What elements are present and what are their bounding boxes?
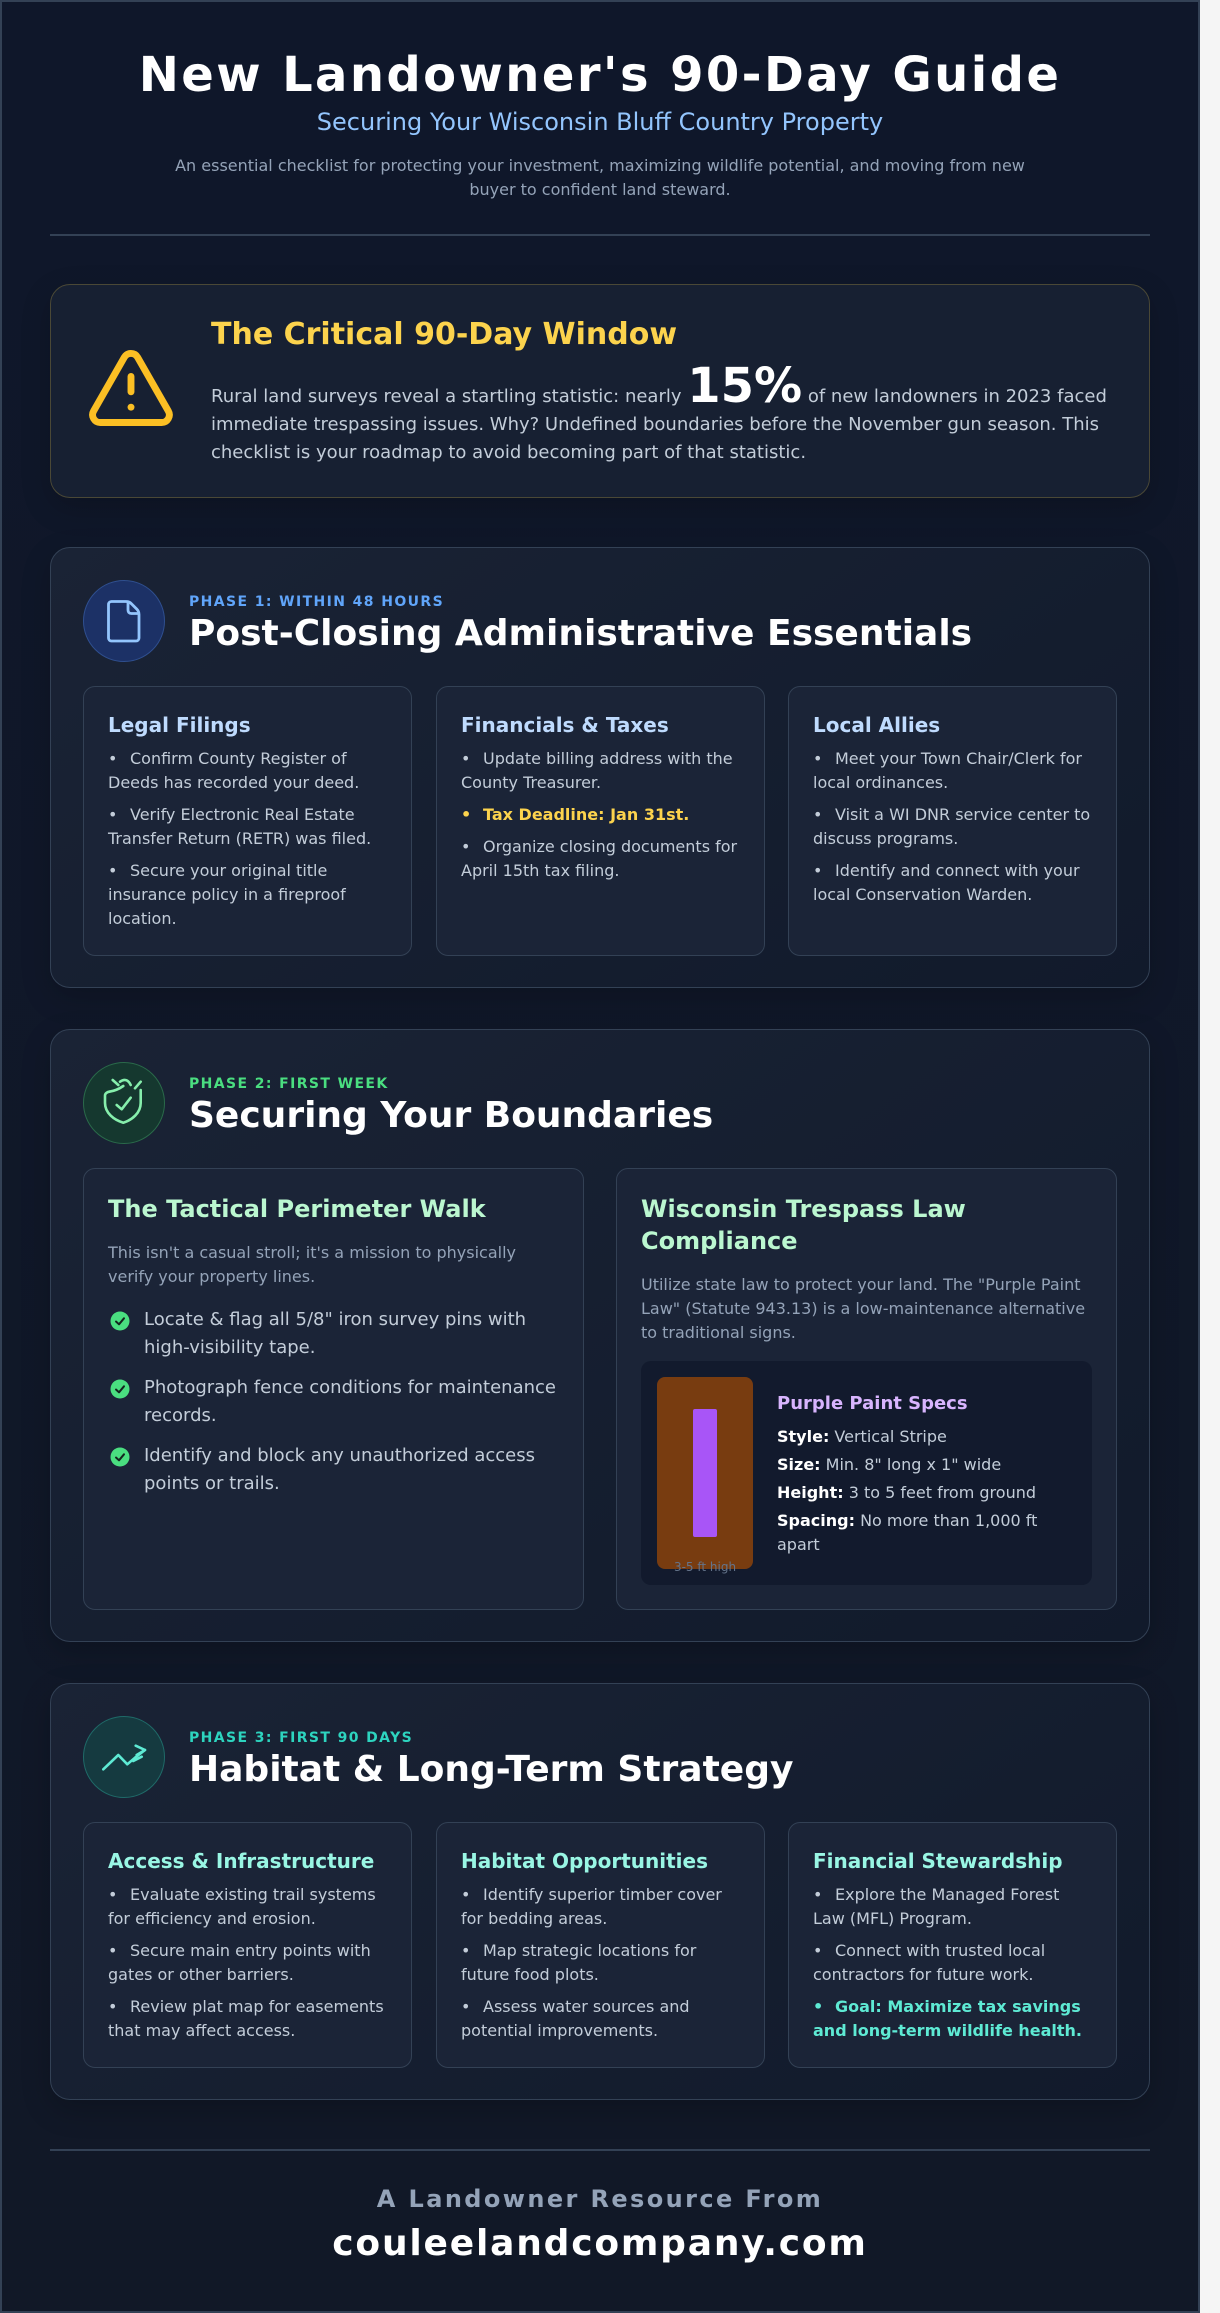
- card heading: Wisconsin Trespass Law Compliance: [641, 1195, 966, 1255]
- panel: critical 90-day window: [50, 284, 1150, 498]
- header: [139, 47, 1061, 199]
- card: financial stewardship: •: [813, 1885, 822, 1904]
- card: financial stewardship: •: [813, 1941, 822, 1960]
- card: tactical perimeter walk: [83, 1168, 584, 1610]
- card: local allies: Identify and connect with your local Conservation Warden.: [813, 861, 1080, 904]
- body text with 15% statistic: Rural land surveys reveal a startling statistic: nearly 15% of new landowners in 2023 faced: [211, 358, 1107, 414]
- card: local allies: Local Allies: [813, 713, 940, 737]
- footer label: A Landowner Resource From: [377, 2185, 823, 2213]
- card: financials and taxes: [436, 686, 765, 956]
- card: trespass law: [616, 1168, 1117, 1610]
- phase heading: Securing Your Boundaries: [189, 1095, 713, 1136]
- card intro: This isn't a casual stroll; it's a mission to physically verify your property lines.: [108, 1243, 516, 1286]
- card: habitat opportunities: [436, 1822, 765, 2068]
- card: local allies: [788, 686, 1117, 956]
- card: financials and taxes: Update billing address with the County Treasurer.: [461, 749, 733, 792]
- card: legal filings: Legal Filings: [108, 713, 251, 737]
- card intro: Utilize state law to protect your land. The "Purple Paint Law" (Statute 943.13) is a low-maintenance alternative to traditional signs.: [641, 1275, 1085, 1342]
- card: financial stewardship: [788, 1822, 1117, 2068]
- spec list: [777, 1393, 1037, 1554]
- spec list: Height: 3 to 5 feet from ground: [777, 1483, 1036, 1502]
- purple paint spec box: [641, 1361, 1092, 1585]
- card: access and infrastructure: •: [108, 1885, 117, 1904]
- icon: warning triangle: [89, 350, 173, 426]
- card: habitat opportunities: •: [461, 1941, 470, 1960]
- heading: The Critical 90-Day Window: [211, 317, 677, 352]
- checklist: Locate & flag all 5/8" iron survey pins with high-visibility tape.: [144, 1309, 526, 1358]
- phase heading: Post-Closing Administrative Essentials: [189, 613, 972, 654]
- intro text: buyer to confident land steward.: [469, 180, 731, 199]
- card: access and infrastructure: Secure main entry points with gates or other barriers.: [108, 1941, 371, 1984]
- card: habitat opportunities: Assess water sources and potential improvements.: [461, 1997, 690, 2040]
- card: financial stewardship: Goal: Maximize tax savings and long-term wildlife health.: [813, 1997, 1082, 2040]
- card: habitat opportunities: •: [461, 1997, 470, 2016]
- spec list: Spacing: No more than 1,000 ft apart: [777, 1511, 1037, 1554]
- card: access and infrastructure: Evaluate existing trail systems for efficiency and erosion.: [108, 1885, 376, 1928]
- card: legal filings: •: [108, 805, 117, 824]
- phase label: PHASE 1: WITHIN 48 HOURS: [189, 594, 444, 610]
- card: habitat opportunities: •: [461, 1885, 470, 1904]
- card: financials and taxes: •: [461, 837, 470, 856]
- card: financials and taxes: Organize closing documents for April 15th tax filing.: [461, 837, 737, 880]
- card: access and infrastructure: [83, 1822, 412, 2068]
- card: local allies: •: [813, 749, 822, 768]
- card: habitat opportunities: Habitat Opportunities: [461, 1849, 708, 1873]
- phase heading: Habitat & Long-Term Strategy: [189, 1749, 793, 1790]
- card: financial stewardship: Connect with trusted local contractors for future work.: [813, 1941, 1045, 1984]
- subtitle: Securing Your Wisconsin Bluff Country Property: [317, 108, 883, 136]
- footer url: couleelandcompany.com: [332, 2223, 868, 2264]
- card: financials and taxes: •: [461, 805, 471, 824]
- card: access and infrastructure: Access & Infrastructure: [108, 1849, 374, 1873]
- illustration: tree post with purple stripe: [657, 1377, 753, 1569]
- card: legal filings: Confirm County Register of Deeds has recorded your deed.: [108, 749, 359, 792]
- card: access and infrastructure: •: [108, 1941, 117, 1960]
- spec list: Purple Paint Specs: [777, 1393, 968, 1414]
- card: local allies: •: [813, 805, 822, 824]
- footer: [332, 2185, 868, 2264]
- intro text: An essential checklist for protecting your investment, maximizing wildlife potential, and moving from new: [175, 156, 1025, 175]
- card heading: The Tactical Perimeter Walk: [108, 1195, 486, 1223]
- card: access and infrastructure: Review plat map for easements that may affect access.: [108, 1997, 384, 2040]
- phase label: PHASE 3: FIRST 90 DAYS: [189, 1730, 413, 1746]
- card: legal filings: •: [108, 861, 117, 880]
- icon: document: [83, 580, 165, 662]
- card: financials and taxes: Financials & Taxes: [461, 713, 669, 737]
- card: access and infrastructure: •: [108, 1997, 117, 2016]
- card: legal filings: •: [108, 749, 117, 768]
- card: legal filings: Secure your original title insurance policy in a fireproof location.: [108, 861, 346, 928]
- card: financial stewardship: Financial Stewardship: [813, 1849, 1063, 1873]
- illustration: tree post with purple stripe: 3-5 ft high: [674, 1560, 736, 1574]
- card: local allies: Visit a WI DNR service center to discuss programs.: [813, 805, 1090, 848]
- panel: phase 3: [50, 1683, 1150, 2100]
- panel: phase 2: [50, 1029, 1150, 1642]
- card: habitat opportunities: Identify superior timber cover for bedding areas.: [461, 1885, 722, 1928]
- body text with 15% statistic: checklist is your roadmap to avoid becoming part of that statistic.: [211, 442, 806, 463]
- card: legal filings: [83, 686, 412, 956]
- card: habitat opportunities: Map strategic locations for future food plots.: [461, 1941, 696, 1984]
- checklist: Identify and block any unauthorized access points or trails.: [144, 1445, 535, 1494]
- card: financial stewardship: Explore the Managed Forest Law (MFL) Program.: [813, 1885, 1059, 1928]
- card: financial stewardship: •: [813, 1997, 823, 2016]
- intro text: [175, 156, 1025, 199]
- phase label: PHASE 2: FIRST WEEK: [189, 1076, 389, 1092]
- card: legal filings: Verify Electronic Real Estate Transfer Return (RETR) was filed.: [108, 805, 371, 848]
- spec list: Size: Min. 8" long x 1" wide: [777, 1455, 1001, 1474]
- title: New Landowner's 90-Day Guide: [139, 47, 1061, 103]
- icon: trending chart: [83, 1716, 165, 1798]
- checklist: [110, 1309, 556, 1494]
- body text with 15% statistic: immediate trespassing issues. Why? Undefined boundaries before the November gun season. This: [211, 414, 1099, 435]
- card: financials and taxes: Tax Deadline: Jan 31st.: [483, 805, 689, 824]
- card: local allies: Meet your Town Chair/Clerk for local ordinances.: [813, 749, 1082, 792]
- card: financials and taxes: •: [461, 749, 470, 768]
- body text with 15% statistic: [211, 358, 1107, 463]
- panel: phase 1: [50, 547, 1150, 988]
- spec list: Style: Vertical Stripe: [777, 1427, 947, 1446]
- checklist: Photograph fence conditions for maintenance records.: [144, 1377, 556, 1426]
- card: local allies: •: [813, 861, 822, 880]
- icon: shield check: [83, 1062, 165, 1144]
